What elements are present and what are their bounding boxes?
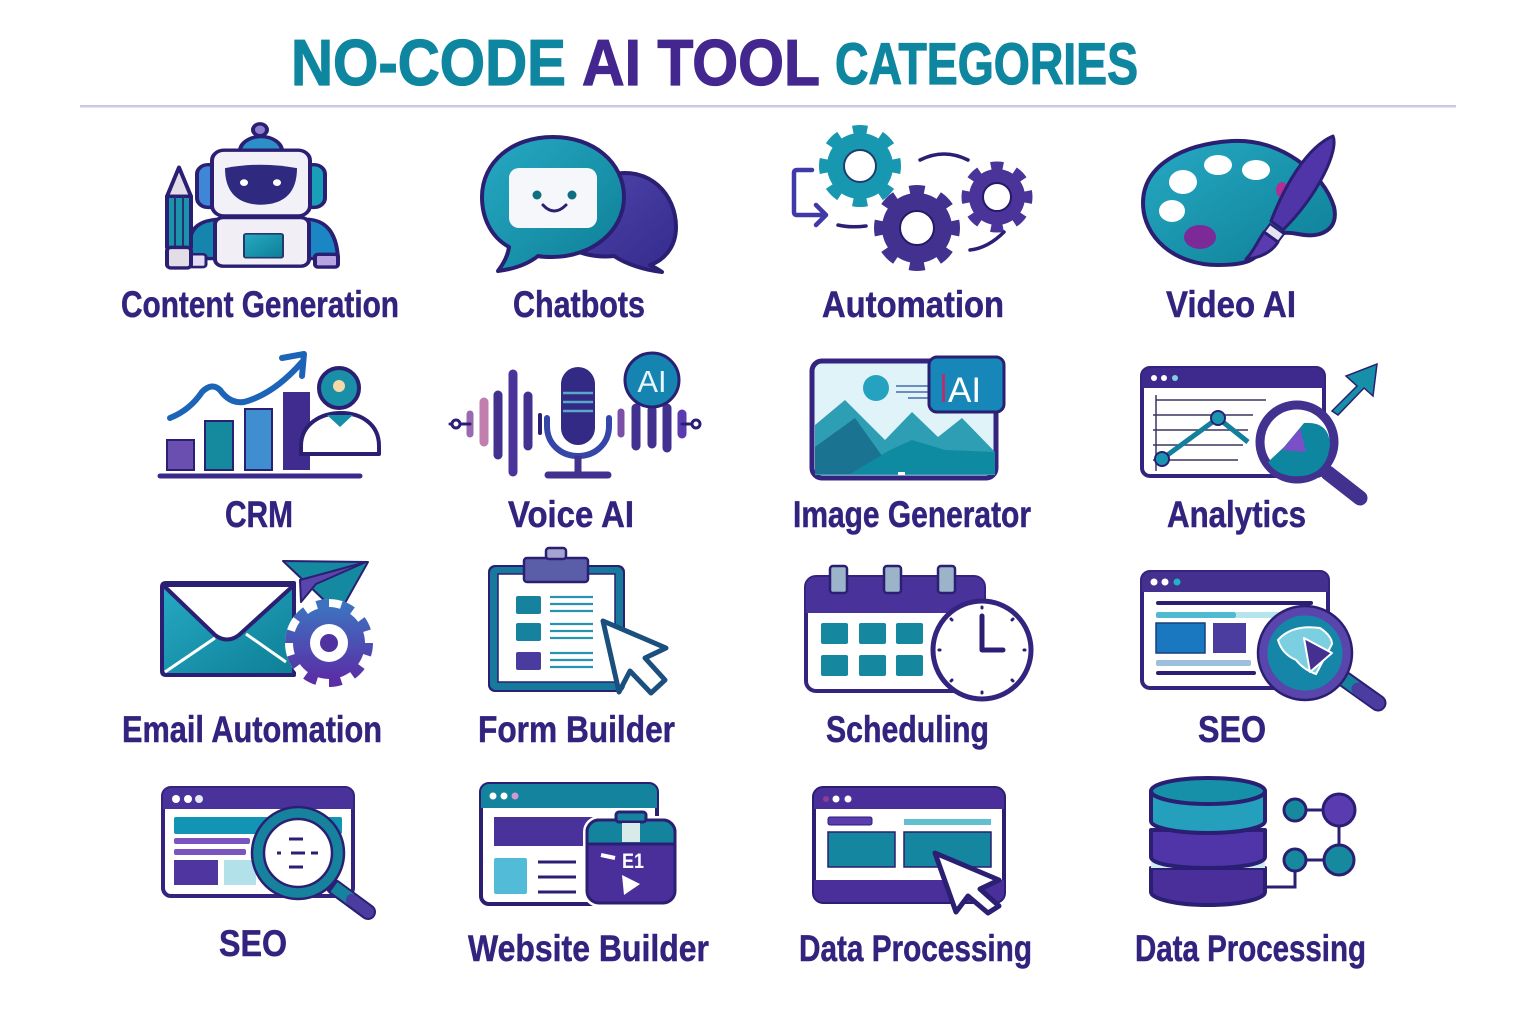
title <box>291 26 1138 99</box>
browser window <box>481 784 657 904</box>
label: Website Builder: Website Builder <box>468 928 709 969</box>
label: Data Processing: Data Processing <box>1135 928 1366 969</box>
clipboard badge <box>587 812 675 903</box>
connector lines <box>1262 810 1339 887</box>
robot ears <box>197 165 325 207</box>
cursor <box>603 621 666 693</box>
teal gear <box>825 131 895 201</box>
icon: scheduling <box>806 566 1031 699</box>
dark gear <box>880 191 954 265</box>
clipboard <box>488 565 625 692</box>
line chart <box>1153 395 1266 471</box>
icon: analytics <box>1142 364 1377 498</box>
page content <box>174 817 342 885</box>
paper plane <box>283 561 368 603</box>
brush <box>1246 136 1334 259</box>
clip <box>524 548 588 582</box>
label: Data Processing: Data Processing <box>799 928 1032 969</box>
label: Analytics: Analytics <box>1167 494 1306 535</box>
paint wells <box>1159 155 1288 249</box>
icon: email automation <box>162 561 373 687</box>
browser window <box>163 788 353 896</box>
magnifier <box>252 807 368 912</box>
robot arms <box>190 219 338 259</box>
browser window <box>1142 368 1324 476</box>
icon: form builder <box>488 548 666 693</box>
icon: database with nodes <box>1151 778 1355 905</box>
calendar <box>806 577 984 691</box>
icon: palette and brush <box>1143 136 1335 265</box>
magnifier <box>1260 405 1360 498</box>
base line <box>160 474 360 478</box>
cursor <box>935 853 999 913</box>
gear <box>285 599 373 687</box>
rings <box>830 566 955 593</box>
AI badge: AI <box>948 371 981 410</box>
title: CATEGORIES <box>835 32 1138 97</box>
label: SEO: SEO <box>1198 709 1266 750</box>
AI badge: AI <box>637 364 667 399</box>
bars <box>167 392 310 470</box>
front bubble <box>482 137 624 271</box>
clipboard badge: E1 <box>622 850 644 873</box>
robot visor <box>225 165 297 205</box>
icon: automation gears <box>794 131 1027 265</box>
envelope <box>162 583 294 675</box>
tablet frame <box>812 361 996 478</box>
person <box>301 368 379 454</box>
form rows <box>516 596 593 670</box>
microphone <box>547 367 609 475</box>
icon: SEO window with magnifier <box>1142 572 1378 703</box>
pencil <box>167 167 191 268</box>
label: Content Generation: Content Generation <box>121 284 399 325</box>
browser window <box>1142 572 1328 688</box>
robot hands <box>188 254 338 267</box>
robot head <box>212 150 310 216</box>
label: Form Builder: Form Builder <box>478 709 675 750</box>
robot antenna <box>240 124 282 151</box>
title: AI TOOL <box>582 26 820 99</box>
icon: data processing window with cursor <box>814 788 1004 913</box>
browser window <box>814 788 1004 902</box>
label: Chatbots: Chatbots <box>513 284 645 325</box>
mountains <box>815 400 995 475</box>
trend arrow <box>170 354 304 418</box>
label: Scheduling: Scheduling <box>826 709 989 750</box>
clock <box>933 601 1031 699</box>
page content <box>828 817 991 867</box>
magnifier <box>1258 606 1378 703</box>
label: Automation: Automation <box>822 284 1004 325</box>
robot screen <box>244 234 283 258</box>
right waveform <box>621 408 700 448</box>
trend arrow <box>1332 364 1377 415</box>
AI badge <box>929 357 1004 412</box>
icon: CRM chart and person <box>160 354 379 476</box>
label: SEO: SEO <box>219 923 287 964</box>
robot body <box>215 218 309 266</box>
label: Voice AI: Voice AI <box>508 494 634 535</box>
label: Image Generator: Image Generator <box>793 494 1031 535</box>
page content <box>1156 601 1313 675</box>
day cells <box>821 623 923 676</box>
sun <box>863 375 930 401</box>
left waveform <box>450 374 540 472</box>
dashed connectors <box>838 154 1004 250</box>
database stack <box>1151 778 1265 905</box>
label: Email Automation: Email Automation <box>122 709 382 750</box>
icon: website builder <box>481 784 675 904</box>
icon: image generator <box>812 357 1004 478</box>
bot face <box>509 168 597 228</box>
icon: chat bubbles <box>482 137 676 272</box>
palette <box>1143 141 1335 265</box>
AI badge <box>625 353 679 407</box>
small gear <box>967 167 1027 227</box>
icon: SEO window with magnifier, second <box>163 788 368 912</box>
page content <box>494 817 602 894</box>
label: CRM: CRM <box>225 494 293 535</box>
label: Video AI: Video AI <box>1166 284 1296 325</box>
icon: robot with pencil <box>167 124 338 268</box>
loop arrow <box>794 170 826 225</box>
nodes <box>1284 794 1355 875</box>
icon: voice microphone <box>450 353 700 475</box>
back bubble <box>564 173 676 272</box>
title: NO-CODE <box>291 26 566 99</box>
